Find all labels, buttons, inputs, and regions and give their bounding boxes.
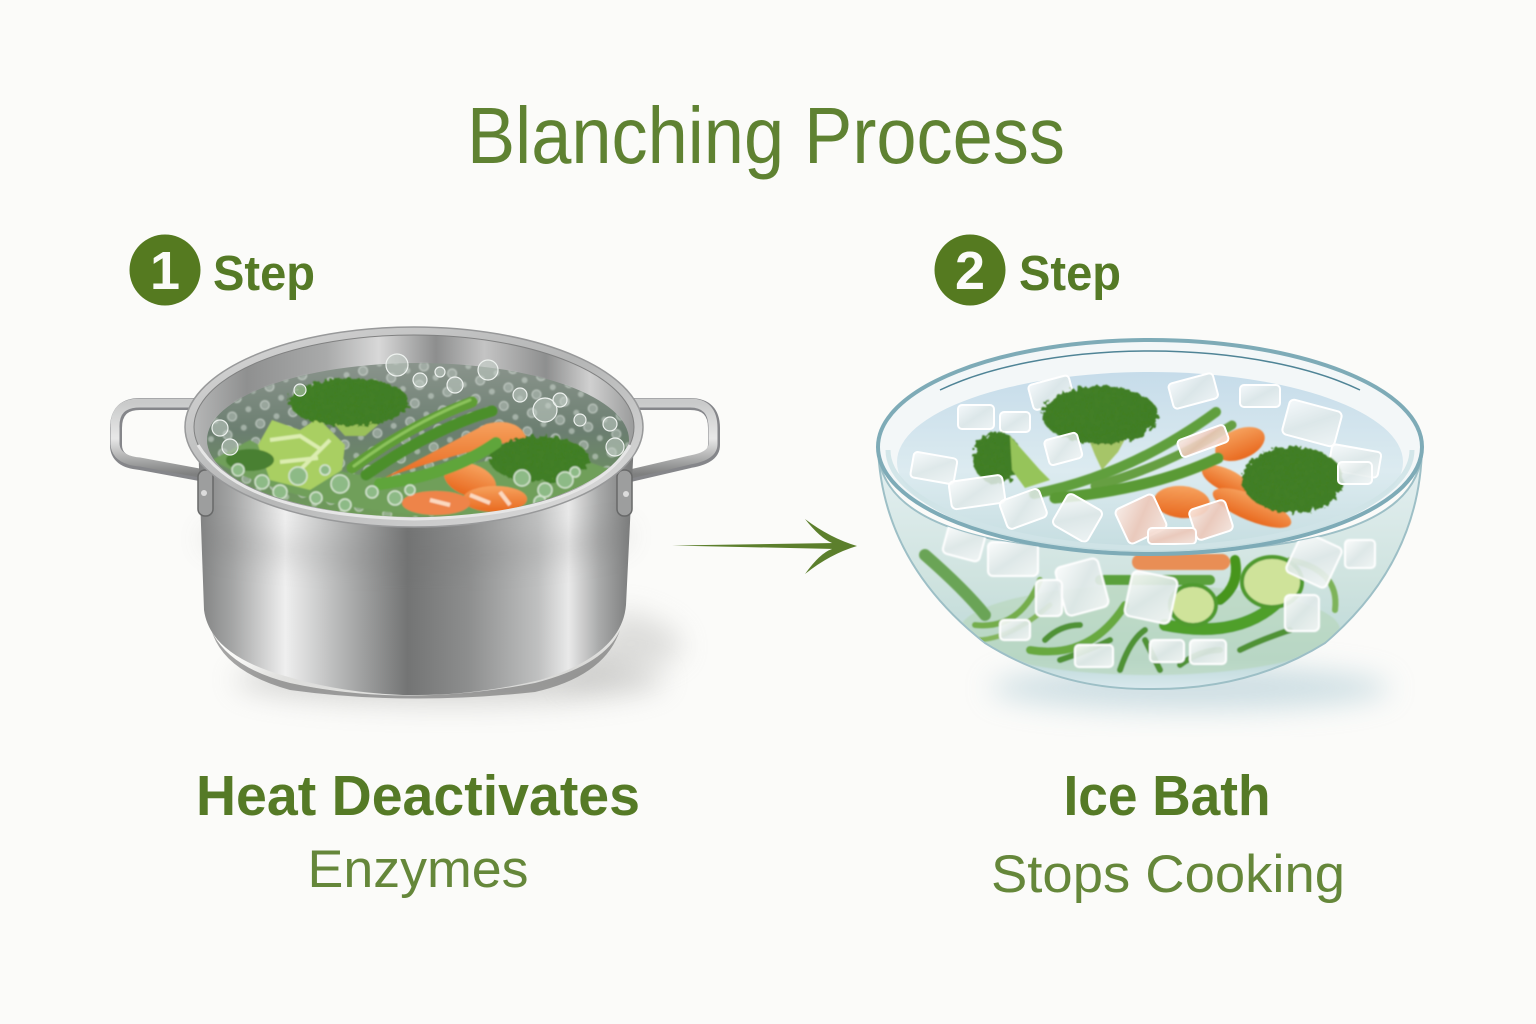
illustration: stainless steel pot with boiling vegetables <box>115 327 714 704</box>
glass bowl body <box>878 447 1422 689</box>
pot body <box>198 440 634 695</box>
broccoli top <box>1085 430 1130 470</box>
arrow from pot to ice bath <box>672 519 857 574</box>
step 2 label <box>934 234 1121 306</box>
carrots <box>384 422 527 478</box>
step 2 label: 2 <box>955 241 985 301</box>
cabbage <box>258 418 345 490</box>
vegetables in the pot <box>212 378 612 516</box>
caption: step 1 <box>196 764 640 899</box>
caption: step 2: Ice Bath <box>1064 764 1270 828</box>
vegetables in the bowl <box>973 386 1344 536</box>
step 1 label <box>130 234 315 306</box>
illustration: glass bowl with ice bath and vegetables <box>878 338 1422 710</box>
step 1 label: Step <box>213 247 315 301</box>
caption: step 2: Stops Cooking <box>991 845 1345 904</box>
broccoli left <box>973 432 1021 484</box>
submerged vegetables and ice <box>925 524 1375 675</box>
caption: step 1: Enzymes <box>308 840 528 899</box>
rivets <box>198 470 632 516</box>
front floating ice cubes <box>948 432 1372 543</box>
pot front rim highlight <box>198 445 630 519</box>
submerged ice cubes <box>942 524 1375 667</box>
peas <box>232 464 580 511</box>
step 1 label: 1 <box>150 241 180 301</box>
caption: step 2 <box>991 764 1345 904</box>
step 2 label: Step <box>1019 247 1121 301</box>
greens and peas <box>212 440 612 516</box>
boiling water with bubbles <box>207 354 629 517</box>
broccoli <box>334 420 378 437</box>
glass rim <box>878 340 1422 554</box>
broccoli right <box>1242 447 1344 513</box>
back of bowl interior <box>878 338 1422 552</box>
title: Blanching Process <box>467 91 1065 180</box>
caption: step 1: Heat Deactivates <box>196 764 640 828</box>
left handle <box>115 403 714 476</box>
pot rim and interior <box>185 327 643 527</box>
water surface <box>897 372 1403 552</box>
green beans <box>352 400 496 484</box>
surface bubbles <box>212 354 624 456</box>
cucumbers <box>1170 557 1302 625</box>
carrots <box>1153 420 1296 536</box>
green beans <box>1034 412 1232 498</box>
floating ice cubes back row <box>910 372 1382 485</box>
